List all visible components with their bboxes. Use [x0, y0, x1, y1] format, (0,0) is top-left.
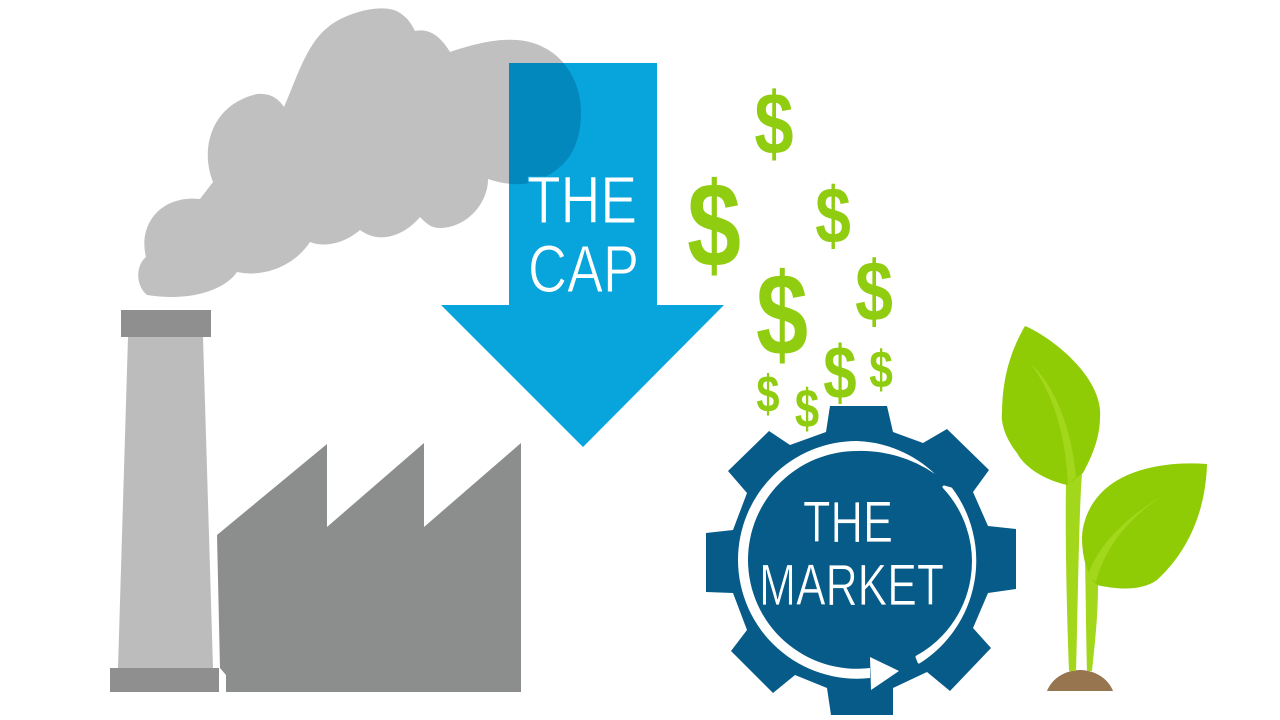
- heading: the cap: THE: [527, 163, 637, 238]
- circular arrow: [738, 441, 975, 690]
- icons: dollar signs: $: [855, 244, 893, 339]
- icons: dollar signs: $: [756, 364, 780, 423]
- icons: dollar signs: $: [815, 171, 851, 261]
- icon: smoke cloud: [138, 8, 581, 297]
- icon: green plant: [1002, 326, 1207, 691]
- icons: dollar signs: [687, 74, 893, 439]
- icon: factory with chimney: [110, 310, 521, 692]
- icons: dollar signs: $: [756, 250, 808, 380]
- heading: the cap: CAP: [528, 232, 639, 307]
- icon: gear, the market: [706, 406, 1016, 715]
- icons: dollar signs: $: [823, 332, 857, 415]
- icons: dollar signs: $: [869, 341, 893, 400]
- icons: dollar signs: $: [687, 158, 741, 293]
- arrow: the cap: [441, 40, 724, 447]
- icons: dollar signs: $: [754, 74, 794, 173]
- icons: dollar signs: $: [795, 379, 819, 439]
- heading: the market: THE: [803, 490, 893, 555]
- heading: the market: MARKET: [759, 553, 944, 618]
